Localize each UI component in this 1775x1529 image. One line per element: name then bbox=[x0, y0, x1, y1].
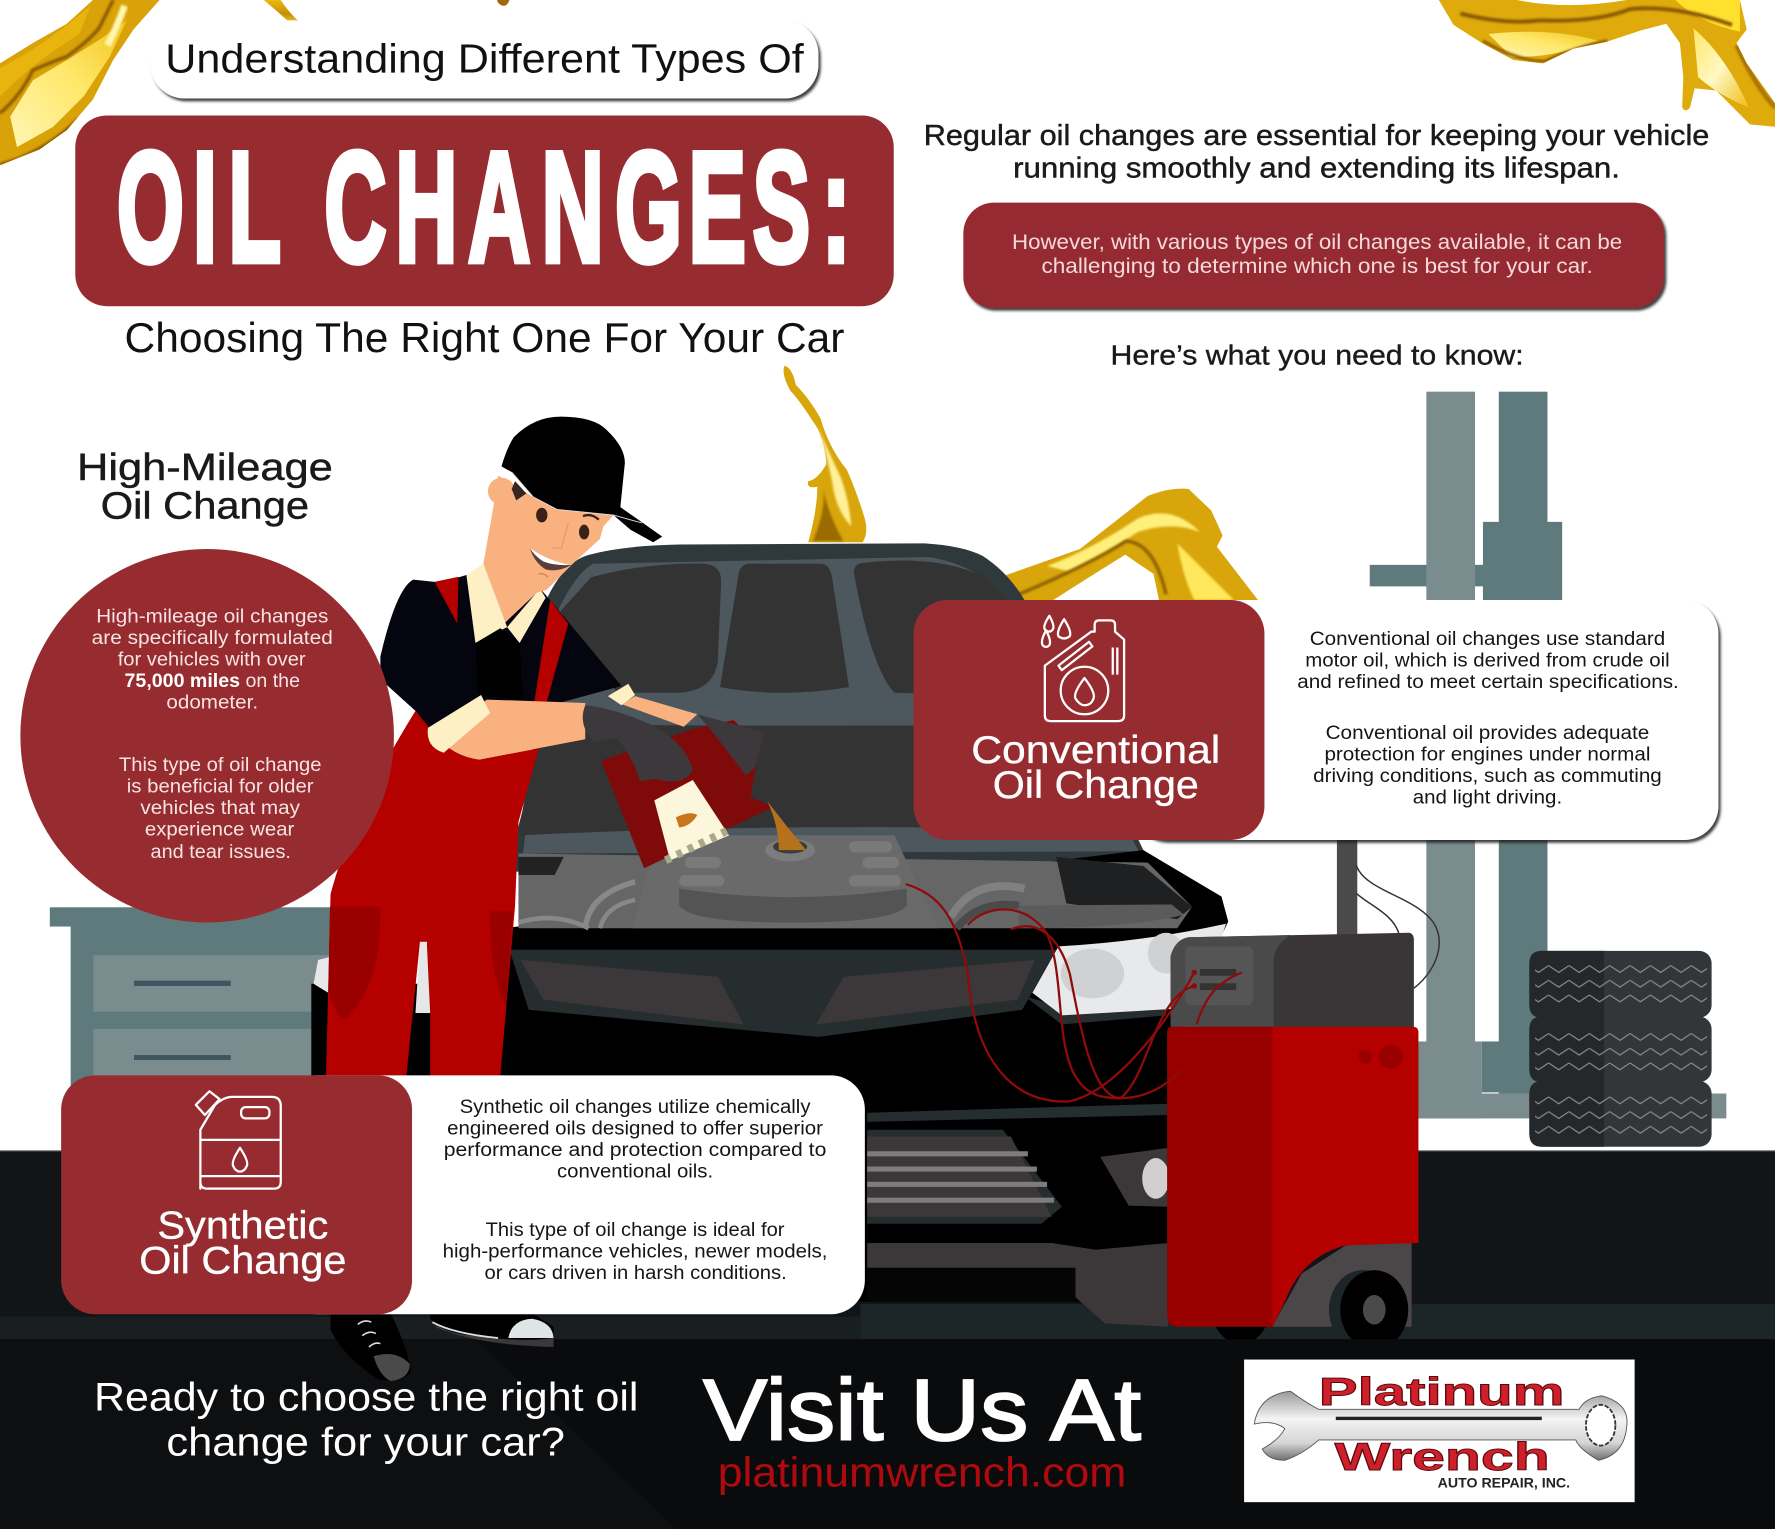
panel: synthetic oil change bbox=[61, 1075, 865, 1314]
intro heading: running smoothly and extending its lifespan. bbox=[1013, 153, 1620, 185]
floor bbox=[0, 1150, 1775, 1343]
intro heading: Regular oil changes are essential for keeping your vehicle bbox=[924, 120, 1709, 152]
circle text: first paragraph: for vehicles with over bbox=[118, 650, 306, 671]
high-mileage heading bbox=[77, 447, 333, 527]
eyes and brow bbox=[536, 508, 599, 539]
bottom band bbox=[0, 1339, 1775, 1529]
logo: Platinum Wrench bbox=[1244, 1360, 1635, 1502]
gap between legs bbox=[406, 942, 430, 1075]
intro heading bbox=[924, 120, 1709, 185]
cap edge line bbox=[512, 472, 642, 523]
synthetic red card bbox=[61, 1075, 412, 1314]
conventional body text: Conventional oil changes use standard bbox=[1310, 629, 1665, 650]
cabinet bbox=[50, 907, 344, 1150]
poured oil bbox=[768, 801, 806, 850]
logo wordmark bbox=[1319, 1371, 1564, 1479]
nose line bbox=[551, 523, 568, 548]
conventional heading: Conventional bbox=[971, 729, 1220, 772]
red cables bbox=[906, 884, 1242, 1102]
glove right bbox=[697, 714, 764, 775]
synthetic heading: Oil Change bbox=[139, 1240, 346, 1283]
conventional body text: and refined to meet certain specifications. bbox=[1297, 672, 1679, 693]
icon: oil jug with drops bbox=[1042, 616, 1124, 721]
circle text: second paragraph: vehicles that may bbox=[140, 798, 300, 819]
title pill: Understanding Different Types Of bbox=[165, 35, 804, 81]
conventional heading: Oil Change bbox=[993, 764, 1199, 807]
circle text: first paragraph: High-mileage oil changes bbox=[96, 607, 328, 628]
utility pole and black cables bbox=[1337, 840, 1439, 988]
service machine bbox=[906, 884, 1418, 1349]
conventional body text: and light driving. bbox=[1413, 788, 1562, 809]
cap bbox=[501, 417, 662, 542]
circle text: second paragraph: is beneficial for older bbox=[127, 776, 314, 797]
raised hood bbox=[509, 543, 1148, 872]
grey base bbox=[1272, 1243, 1412, 1327]
footer question bbox=[94, 1375, 638, 1465]
synthetic body text bbox=[443, 1097, 828, 1284]
apron and trousers bbox=[326, 711, 539, 1075]
conventional body text bbox=[1297, 629, 1679, 809]
shoes bbox=[331, 1313, 554, 1381]
lower grille bbox=[867, 1130, 1062, 1224]
trouser shading bbox=[328, 907, 513, 1020]
circle text: second paragraph bbox=[119, 755, 321, 863]
torso and shirt bbox=[380, 575, 621, 730]
machine dials bbox=[1358, 1045, 1403, 1069]
conventional body card bbox=[1132, 600, 1718, 840]
logo wordmark: Platinum bbox=[1319, 1371, 1564, 1414]
synthetic body text: Synthetic oil changes utilize chemically bbox=[460, 1097, 811, 1118]
panel: high-mileage circle bbox=[20, 549, 394, 923]
oil can bbox=[601, 720, 773, 868]
synthetic heading: Synthetic bbox=[157, 1204, 328, 1247]
oil splash: top left bbox=[0, 0, 160, 165]
circle text: second paragraph: experience wear bbox=[145, 819, 295, 840]
conventional red card bbox=[914, 600, 1264, 840]
logo wrench bbox=[1254, 1391, 1627, 1460]
footer website: platinumwrench.com bbox=[718, 1448, 1126, 1495]
machine top bbox=[1171, 933, 1414, 1029]
circle text: second paragraph: This type of oil change bbox=[119, 755, 321, 776]
face bbox=[487, 475, 614, 594]
tyre stack bbox=[1529, 951, 1712, 1147]
cuff right bbox=[608, 684, 635, 705]
circle text: first paragraph: odometer. bbox=[166, 693, 258, 714]
title banner: OIL CHANGES: bbox=[117, 120, 850, 294]
left headlight bbox=[314, 954, 340, 996]
oil drip: top centre bbox=[497, 0, 509, 6]
subtitle: Choosing The Right One For Your Car bbox=[125, 314, 845, 361]
conventional body text: motor oil, which is derived from crude oil bbox=[1305, 651, 1670, 672]
car bbox=[311, 543, 1228, 1327]
forearm left bbox=[436, 700, 585, 760]
wheels bbox=[1216, 1270, 1408, 1349]
control panel bbox=[1185, 946, 1253, 1005]
black car body bbox=[504, 850, 1228, 1302]
intro red callout: However, with various types of oil changes available, it can be bbox=[1012, 231, 1622, 254]
synthetic body text: This type of oil change is ideal for bbox=[486, 1220, 785, 1241]
footer question: Ready to choose the right oil bbox=[94, 1375, 638, 1419]
right headlight bbox=[1024, 924, 1226, 1024]
oil filler cap bbox=[765, 839, 815, 861]
synthetic body text: performance and protection compared to bbox=[444, 1140, 826, 1161]
title pill bbox=[151, 20, 818, 98]
oil drip: top bbox=[264, 0, 306, 35]
forearm right bbox=[621, 696, 697, 727]
high-mileage heading: High-Mileage bbox=[77, 447, 333, 489]
icon: synthetic oil canister bbox=[196, 1091, 281, 1189]
synthetic body text: or cars driven in harsh conditions. bbox=[485, 1263, 787, 1284]
glove left bbox=[583, 705, 693, 781]
engine bay bbox=[518, 854, 1192, 928]
conventional body text: Conventional oil provides adequate bbox=[1326, 723, 1649, 744]
intro red callout bbox=[963, 203, 1664, 308]
logo wordmark: Wrench bbox=[1335, 1436, 1550, 1479]
apron straps bbox=[435, 577, 568, 702]
synthetic body card bbox=[283, 1075, 865, 1314]
footer call to action: Visit Us At bbox=[703, 1362, 1141, 1459]
conventional heading bbox=[971, 729, 1220, 807]
synthetic body text: conventional oils. bbox=[557, 1161, 713, 1182]
circle text: first paragraph: are specifically formulated bbox=[92, 628, 333, 649]
intro red callout: challenging to determine which one is best for your car. bbox=[1041, 255, 1593, 278]
lift columns bbox=[1370, 392, 1726, 1118]
logo tagline: AUTO REPAIR, INC. bbox=[1438, 1475, 1570, 1490]
neck and ear bbox=[483, 478, 540, 627]
collar bbox=[466, 564, 546, 700]
oil splash: centre bbox=[784, 366, 866, 542]
circle text: second paragraph: and tear issues. bbox=[151, 842, 291, 863]
machine panel left bbox=[1171, 935, 1290, 1027]
fog lamp bbox=[1100, 1148, 1169, 1207]
mechanic bbox=[326, 417, 806, 1075]
conventional body text: driving conditions, such as commuting bbox=[1313, 766, 1662, 787]
oil splash: behind car bbox=[1003, 489, 1259, 601]
cuff left bbox=[428, 695, 490, 753]
circle text: first paragraph bbox=[92, 607, 333, 714]
footer question: change for your car? bbox=[166, 1421, 565, 1465]
smile bbox=[530, 548, 572, 577]
front grille band bbox=[509, 950, 1056, 1037]
section prompt: Here’s what you need to know: bbox=[1111, 340, 1524, 371]
red body bbox=[1167, 1027, 1274, 1327]
synthetic body text: engineered oils designed to offer superior bbox=[447, 1118, 824, 1139]
panel: conventional oil change bbox=[914, 600, 1718, 840]
synthetic body text: high-performance vehicles, newer models, bbox=[443, 1242, 828, 1263]
oil splash: top right bbox=[1439, 0, 1775, 127]
high-mileage heading: Oil Change bbox=[101, 485, 309, 527]
synthetic heading bbox=[139, 1204, 346, 1283]
lower bumper bar bbox=[867, 1104, 1168, 1122]
conventional body text: protection for engines under normal bbox=[1324, 745, 1650, 766]
circle text: first paragraph: 75,000 miles on the bbox=[125, 671, 300, 692]
bumper bbox=[867, 1243, 1168, 1327]
hair bbox=[512, 481, 526, 500]
engine cover bbox=[633, 835, 938, 928]
